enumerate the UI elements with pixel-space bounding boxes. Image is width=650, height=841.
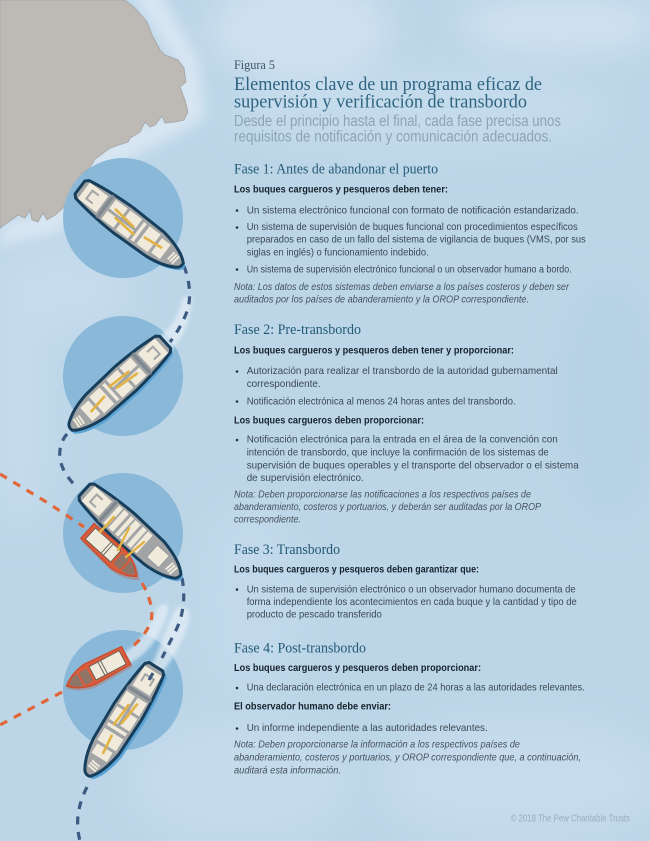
route: fishing vessel dashed line bbox=[0, 474, 152, 725]
note bbox=[234, 490, 541, 526]
heading: fase 4: Fase 4: Post-transbordo bbox=[234, 640, 366, 656]
boat: fishing vessel departing bbox=[61, 645, 132, 699]
bullet list bbox=[236, 583, 577, 621]
title bbox=[234, 74, 542, 112]
carrier route dash over stern bbox=[149, 673, 153, 680]
bullet list: de supervisión electrónico. bbox=[247, 472, 364, 484]
subheading: Los buques cargueros deben proporcionar: bbox=[234, 415, 424, 426]
subtitle: Desde el principio hasta el final, cada fase precisa unos bbox=[234, 113, 561, 130]
title: Elementos clave de un programa eficaz de bbox=[234, 74, 542, 95]
bullet list: Una declaración electrónica en un plazo de 24 horas a las autoridades relevantes. bbox=[247, 682, 585, 694]
note: abanderamiento, costeros y portuarios, y deberán ser auditadas por la OROP bbox=[234, 502, 541, 513]
boat: fishing vessel alongside bbox=[79, 523, 147, 588]
figure label: Figura 5 bbox=[234, 57, 275, 72]
bullet list: producto de pescado transferido bbox=[247, 609, 382, 621]
bullet list: supervisión de buques operables y el transporte del observador o el sistema bbox=[247, 459, 579, 471]
bullet list: Un sistema de supervisión electrónico o un observador humano documenta de bbox=[247, 583, 576, 595]
bullet list bbox=[236, 434, 579, 484]
bullet list: Un informe independiente a las autoridades relevantes. bbox=[247, 722, 488, 734]
subheading: Los buques cargueros y pesqueros deben tener y proporcionar: bbox=[234, 345, 514, 356]
panel: fase 3 bbox=[234, 542, 577, 621]
subheading: Los buques cargueros y pesqueros deben tener: bbox=[234, 184, 448, 195]
heading: fase 1: Fase 1: Antes de abandonar el puerto bbox=[234, 161, 438, 177]
note bbox=[234, 282, 570, 306]
bullet list: correspondiente. bbox=[247, 378, 321, 390]
note bbox=[234, 740, 581, 776]
land mass bbox=[0, 0, 188, 228]
panel: fase 1 bbox=[234, 161, 586, 306]
subheading: El observador humano debe enviar: bbox=[234, 701, 391, 712]
note: Nota: Los datos de estos sistemas deben enviarse a los países costeros y deben ser bbox=[234, 282, 570, 293]
subtitle bbox=[234, 113, 561, 146]
ship: carrier during transshipment bbox=[74, 478, 192, 591]
bullet list: Autorización para realizar el transbordo de la autoridad gubernamental bbox=[247, 365, 558, 377]
subheading: Los buques cargueros y pesqueros deben garantizar que: bbox=[234, 565, 479, 576]
note: correspondiente. bbox=[234, 515, 301, 526]
title: supervisión y verificación de transbordo bbox=[234, 92, 527, 112]
panel: fase 2 bbox=[234, 322, 579, 526]
heading: fase 2: Fase 2: Pre-transbordo bbox=[234, 322, 361, 338]
bullet list: Notificación electrónica para la entrada en el área de la convención con bbox=[247, 434, 558, 446]
bullet list: Un sistema de supervisión electrónico funcional o un observador humano a bordo. bbox=[247, 263, 572, 275]
subheading: Los buques cargueros y pesqueros deben proporcionar: bbox=[234, 663, 481, 674]
phase circles bbox=[63, 158, 183, 750]
wakes bbox=[122, 296, 192, 672]
route: carrier dashed line bbox=[60, 266, 190, 841]
ship: carrier pre-transshipment bbox=[60, 330, 178, 444]
bullet list: siglas en inglés) o funcionamiento indebido. bbox=[247, 247, 429, 259]
note: abanderamiento, costeros y portuarios, y OROP correspondiente que, a continuación, bbox=[234, 752, 581, 763]
bullet list: forma independiente los acontecimientos en cada buque y la cantidad y tipo de bbox=[247, 596, 577, 608]
note: Nota: Deben proporcionarse las notificaciones a los respectivos países de bbox=[234, 490, 531, 501]
bullet list: Un sistema electrónico funcional con formato de notificación estandarizado. bbox=[247, 204, 579, 216]
bullet list bbox=[236, 365, 558, 407]
bullet list: intención de transbordo, que incluye la confirmación de los sistemas de bbox=[247, 447, 549, 459]
bullet list bbox=[236, 204, 586, 275]
transfer hoses bbox=[100, 517, 144, 557]
bullet list: Notificación electrónica al menos 24 horas antes del transbordo. bbox=[247, 395, 516, 407]
ship: carrier post-transshipment bbox=[74, 658, 172, 787]
subtitle: requisitos de notificación y comunicación adecuados. bbox=[234, 128, 552, 146]
ship: carrier leaving port bbox=[70, 175, 194, 280]
bullet list: preparados en caso de un fallo del sistema de vigilancia de buques (VMS, por sus bbox=[247, 234, 586, 246]
panel: fase 4 bbox=[234, 640, 585, 776]
note: Nota: Deben proporcionarse la información a los respectivos países de bbox=[234, 740, 520, 751]
bullet list: Un sistema de supervisión de buques funcional con procedimientos específicos bbox=[247, 221, 578, 233]
note: auditará esta información. bbox=[234, 765, 341, 776]
heading: fase 3: Fase 3: Transbordo bbox=[234, 542, 340, 558]
note: auditados por los países de abanderamiento y la OROP correspondiente. bbox=[234, 294, 529, 306]
